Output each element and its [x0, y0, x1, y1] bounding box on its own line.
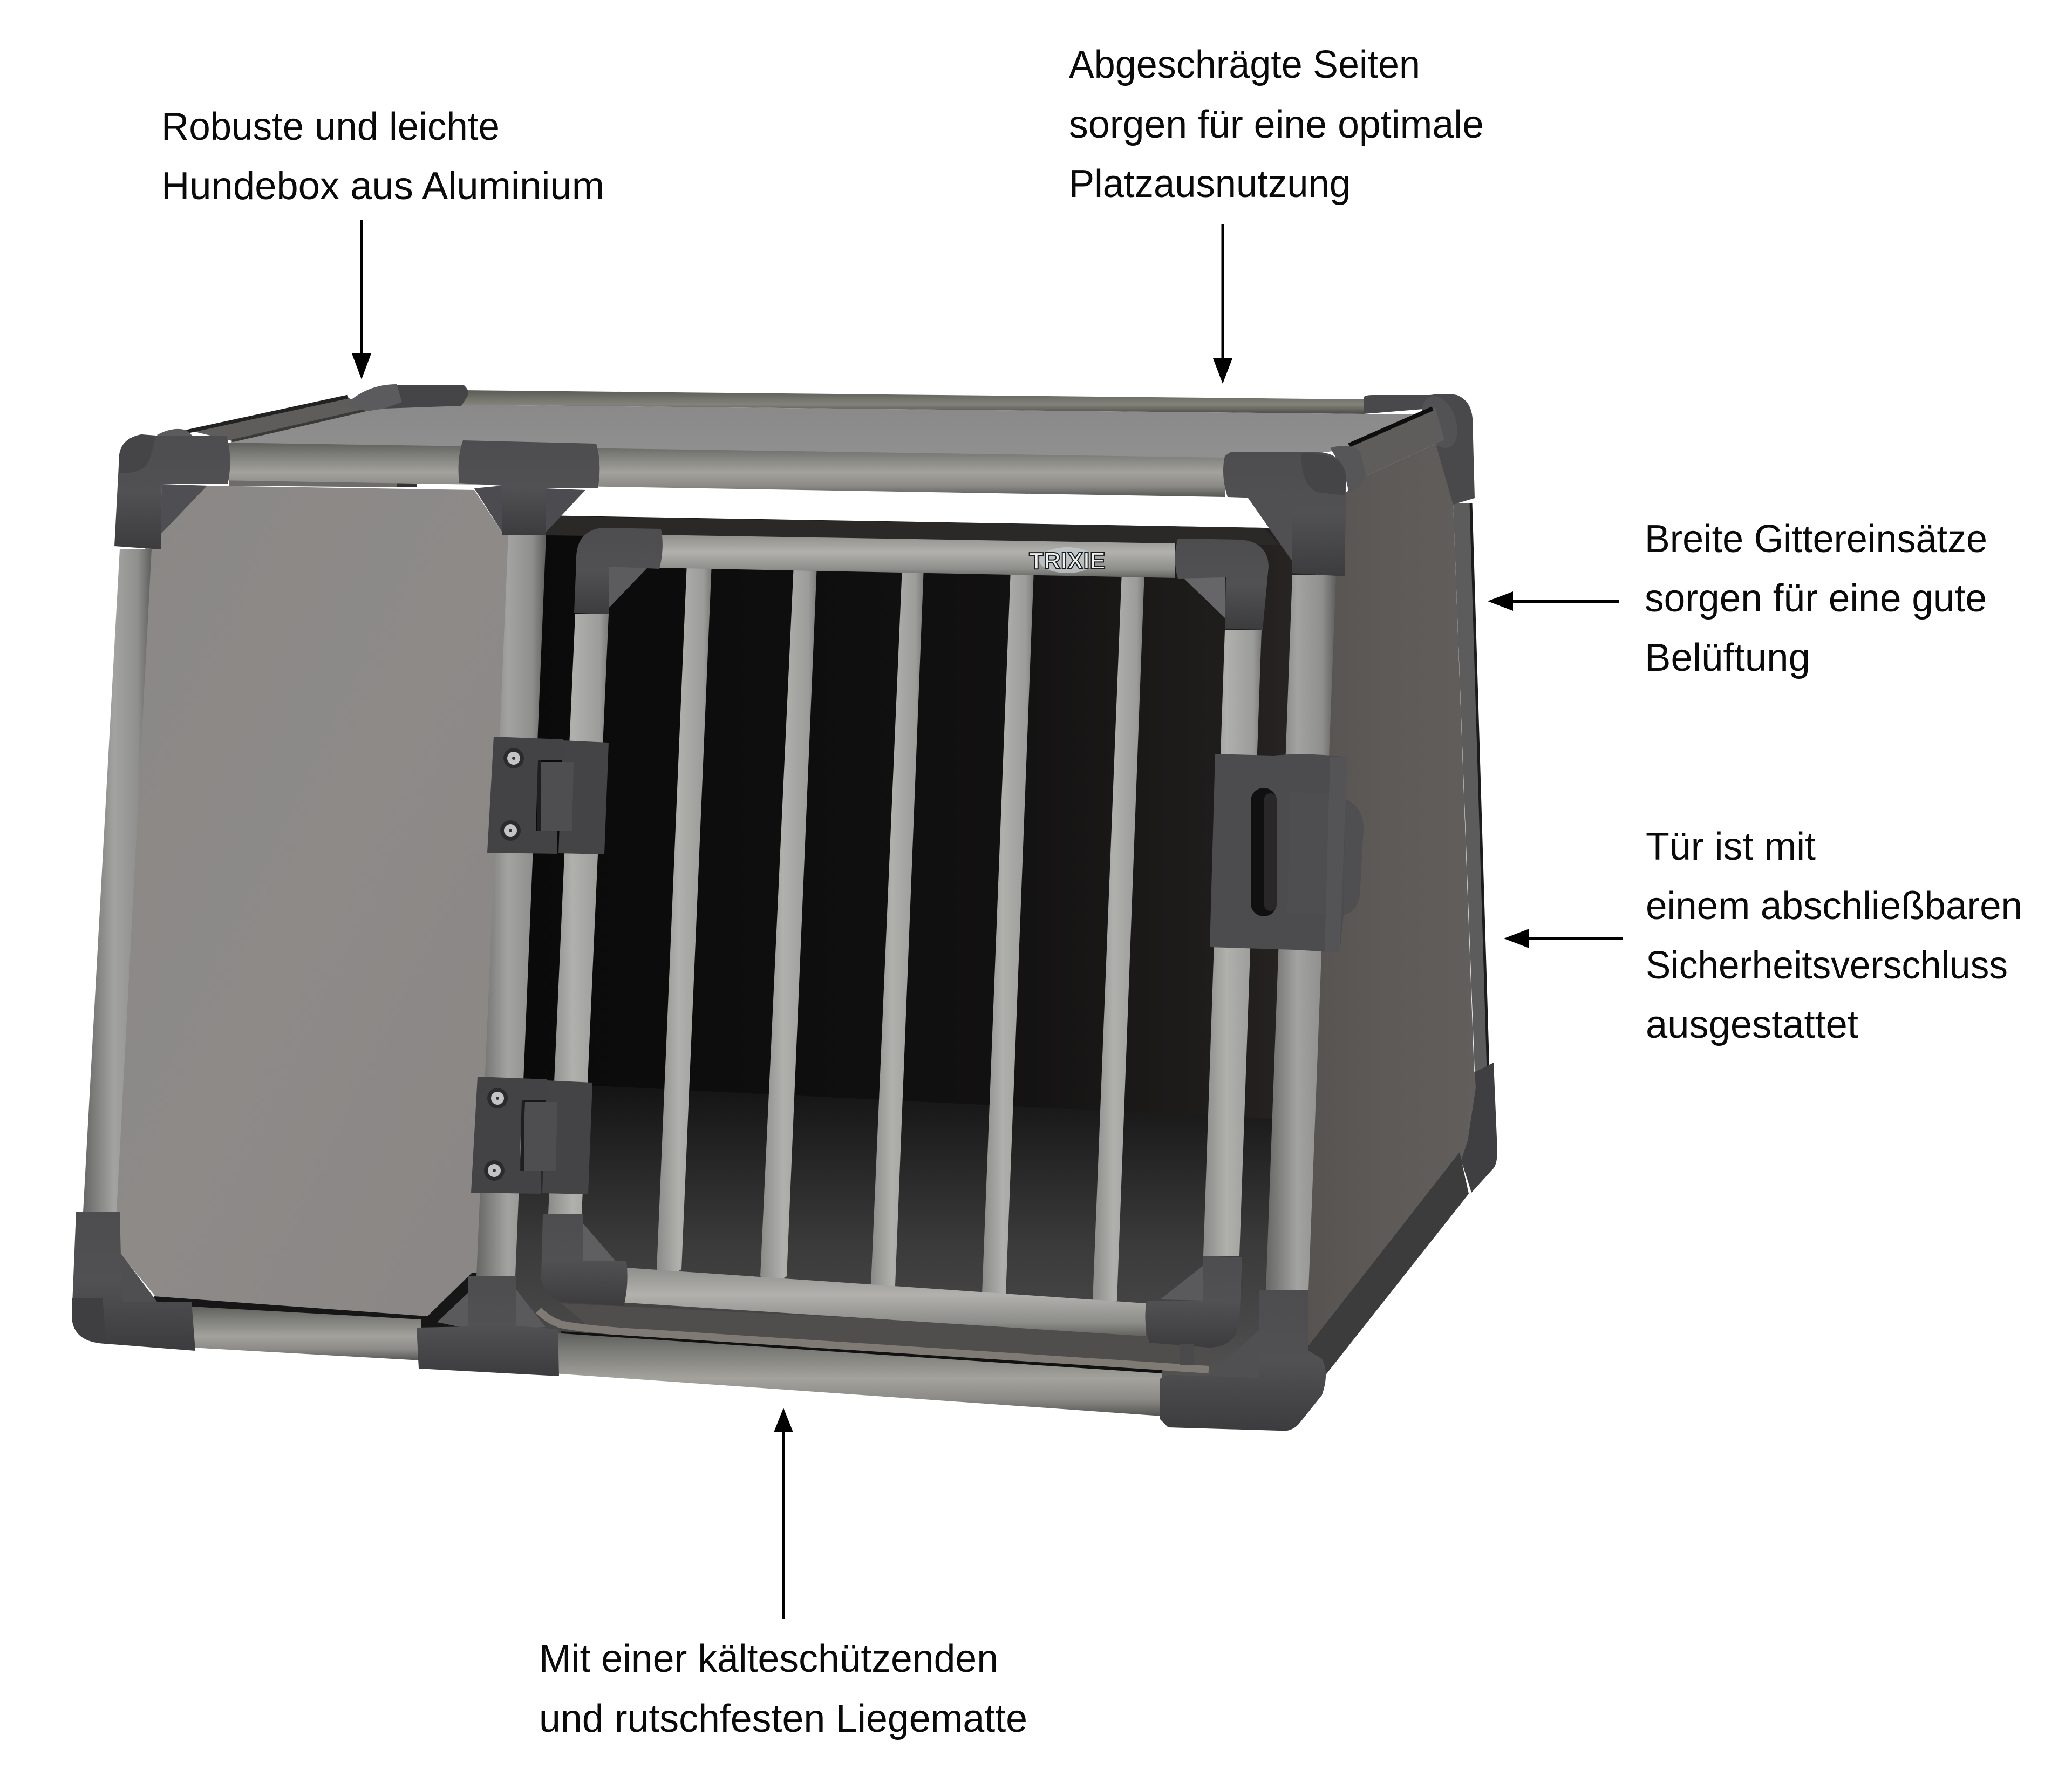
bottom left corner connector — [72, 1212, 195, 1351]
rear bottom elbow — [1461, 1063, 1497, 1193]
front bottom bar right — [554, 1333, 1162, 1416]
door left stile — [548, 614, 609, 1214]
mat border — [539, 1310, 1209, 1370]
lock slot — [1251, 788, 1277, 916]
top right corner connector — [1223, 452, 1346, 576]
callout: ventilation: Breite Gittereinsätze — [1645, 518, 1987, 561]
side panel — [1295, 440, 1481, 1357]
bottom right corner connector — [1160, 1290, 1326, 1431]
rear right strut — [1453, 503, 1489, 1072]
rear right cuff — [1415, 391, 1464, 453]
front left upright — [83, 549, 152, 1212]
rear left cuff — [345, 384, 402, 411]
door — [541, 528, 1269, 1365]
door top bar — [653, 535, 1175, 578]
top T connector — [459, 440, 599, 535]
front centre upright — [476, 535, 546, 1276]
interior — [507, 515, 1317, 1368]
left top tube — [186, 397, 372, 441]
door bars — [657, 562, 1144, 1308]
callout: mat: Mit einer kälteschützenden — [539, 1637, 998, 1680]
callout: lock: einem abschließbaren — [1646, 884, 2022, 928]
bottom T connector — [417, 1276, 559, 1376]
top plate — [226, 405, 1414, 464]
arrow: to mat — [774, 1408, 793, 1619]
front bottom bar left — [192, 1307, 421, 1360]
security lock — [1210, 754, 1364, 952]
callout: lock: Sicherheitsverschluss — [1646, 944, 2008, 987]
mat front area — [561, 1303, 1209, 1371]
top left corner connector — [114, 434, 230, 549]
door bottom left elbow — [541, 1214, 628, 1306]
callout: lock: ausgestattet — [1646, 1003, 1858, 1046]
right top tube — [1349, 407, 1444, 477]
dog crate illustration — [72, 384, 1497, 1431]
front top bar — [219, 443, 1225, 497]
callout: mat: und rutschfesten Liegematte — [539, 1697, 1027, 1740]
door right stile — [1203, 630, 1262, 1256]
rear right elbow — [1364, 394, 1475, 505]
rear top bar — [461, 390, 1364, 414]
callout: sloped sides: Platzausnutzung — [1069, 162, 1351, 206]
front right cuff — [1330, 446, 1366, 493]
callout: ventilation — [1645, 518, 1987, 679]
callout: ventilation: sorgen für eine gute — [1645, 577, 1987, 620]
door bottom bar — [618, 1267, 1146, 1336]
callout: robust aluminium box: Robuste und leichte — [161, 105, 500, 148]
lower side strut — [1306, 1152, 1469, 1376]
panel bottom gap — [154, 1273, 478, 1333]
arrow: to lock — [1504, 929, 1623, 948]
left panel — [108, 486, 510, 1316]
callout: robust aluminium box: Hundebox aus Aluminium — [161, 165, 604, 208]
callout: lock: Tür ist mit — [1646, 825, 1816, 868]
rear left T connector — [384, 385, 468, 409]
callout: lock — [1646, 825, 2022, 1046]
callout: robust aluminium box — [161, 105, 604, 208]
callout: sloped sides: sorgen für eine optimale — [1069, 103, 1484, 146]
arrow: to side — [1488, 591, 1619, 611]
door bottom right elbow — [1145, 1256, 1242, 1365]
door top right elbow — [1175, 539, 1269, 630]
bar shadow line — [561, 1333, 1162, 1372]
door top left elbow — [574, 528, 663, 614]
interior top rail — [546, 516, 1292, 559]
logo: TRIXIE — [1029, 548, 1106, 574]
corner cuff — [157, 429, 195, 440]
upper hinge — [487, 737, 609, 854]
callout: ventilation: Belüftung — [1645, 636, 1810, 679]
arrow: to box top — [1213, 224, 1232, 384]
strip behind left panel — [229, 480, 417, 487]
lower hinge — [471, 1077, 592, 1194]
callout: sloped sides: Abgeschrägte Seiten — [1069, 43, 1420, 86]
arrow: to box top left — [352, 220, 371, 379]
callout: mat — [539, 1637, 1027, 1740]
callout: sloped sides — [1069, 43, 1484, 206]
sleeping mat — [510, 1082, 1295, 1384]
front right upright — [1266, 575, 1336, 1290]
